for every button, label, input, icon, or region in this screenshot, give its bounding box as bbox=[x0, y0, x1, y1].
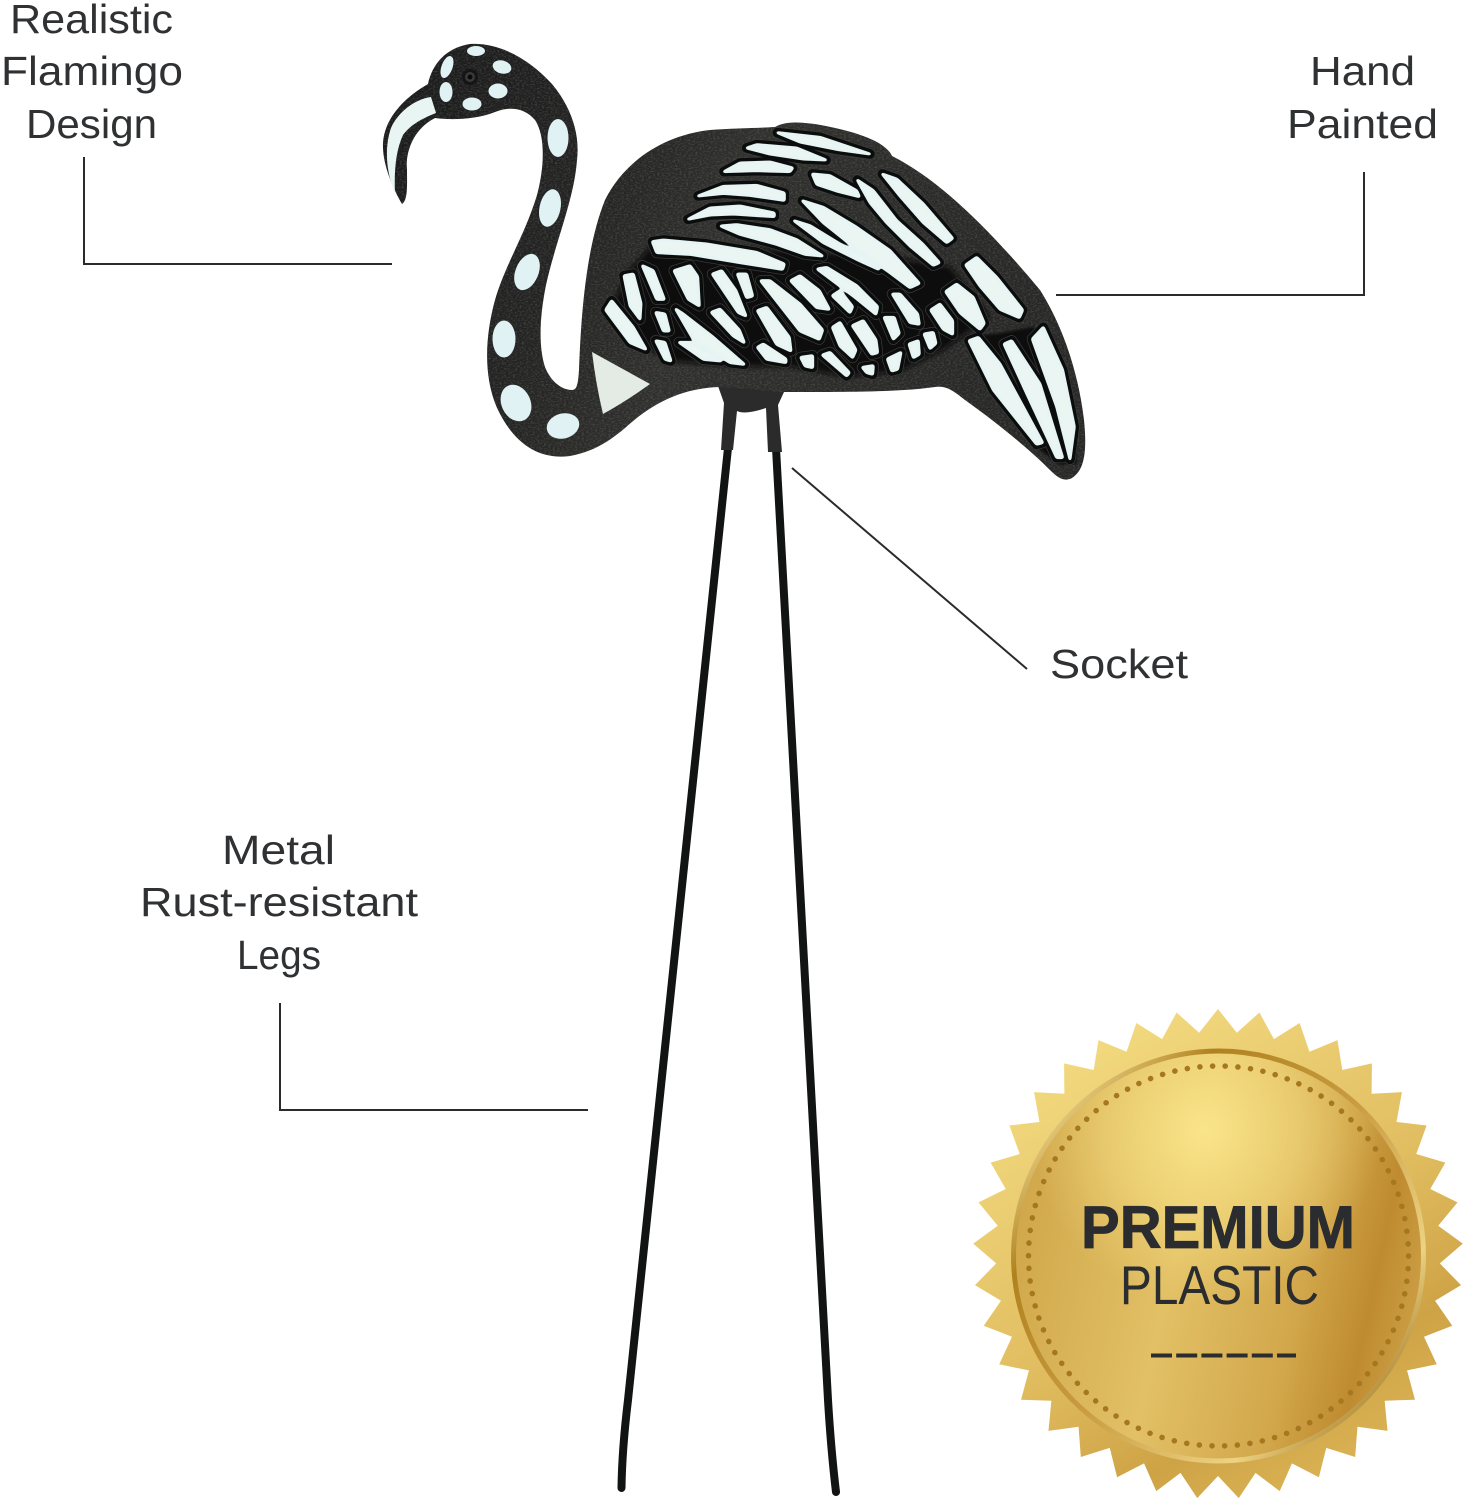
label text: Rust-resistant bbox=[140, 879, 419, 925]
leader line bbox=[280, 1003, 588, 1110]
label text bbox=[1, 0, 183, 147]
callout: realistic flamingo design bbox=[1, 0, 392, 264]
seal text: plastic: PLASTIC bbox=[1120, 1254, 1319, 1316]
seal dashes bbox=[1151, 1354, 1296, 1358]
flamingo illustration bbox=[383, 44, 1085, 1492]
dotted ring bbox=[1028, 1066, 1408, 1446]
label text: Flamingo bbox=[1, 48, 183, 94]
callout: hand painted bbox=[1056, 48, 1438, 295]
callout: socket bbox=[792, 468, 1189, 687]
label text bbox=[140, 827, 419, 978]
label text: Design bbox=[26, 101, 157, 147]
premium plastic gold seal bbox=[970, 1005, 1465, 1500]
label text: Metal bbox=[222, 827, 335, 873]
label text: Socket bbox=[1050, 641, 1189, 687]
wing bbox=[606, 133, 1077, 465]
leader line bbox=[792, 468, 1027, 669]
metal legs bbox=[622, 448, 836, 1492]
seal disc and ring bbox=[1014, 1051, 1424, 1461]
wing dark backing bbox=[610, 243, 990, 377]
seal text: premium: PREMIUM bbox=[1081, 1194, 1355, 1261]
eye bbox=[462, 69, 478, 85]
label text: Hand bbox=[1310, 48, 1415, 94]
beak marking bbox=[387, 97, 436, 193]
sockets bbox=[718, 386, 784, 452]
label text: Painted bbox=[1287, 101, 1438, 147]
feather shadow bbox=[606, 133, 1074, 459]
leader line bbox=[1056, 172, 1364, 295]
wing feathers bbox=[606, 133, 1074, 459]
feather outlines bbox=[606, 133, 1074, 459]
seal starburst bbox=[970, 1005, 1465, 1500]
head and neck spots bbox=[438, 46, 582, 442]
flamingo body and neck bbox=[383, 44, 1085, 480]
tail dark backing bbox=[965, 327, 1077, 465]
label text: Legs bbox=[237, 932, 321, 978]
chest triangle marking bbox=[592, 352, 650, 414]
callout: metal rust-resistant legs bbox=[140, 827, 588, 1110]
label text bbox=[1287, 48, 1438, 147]
leader line bbox=[84, 157, 392, 264]
